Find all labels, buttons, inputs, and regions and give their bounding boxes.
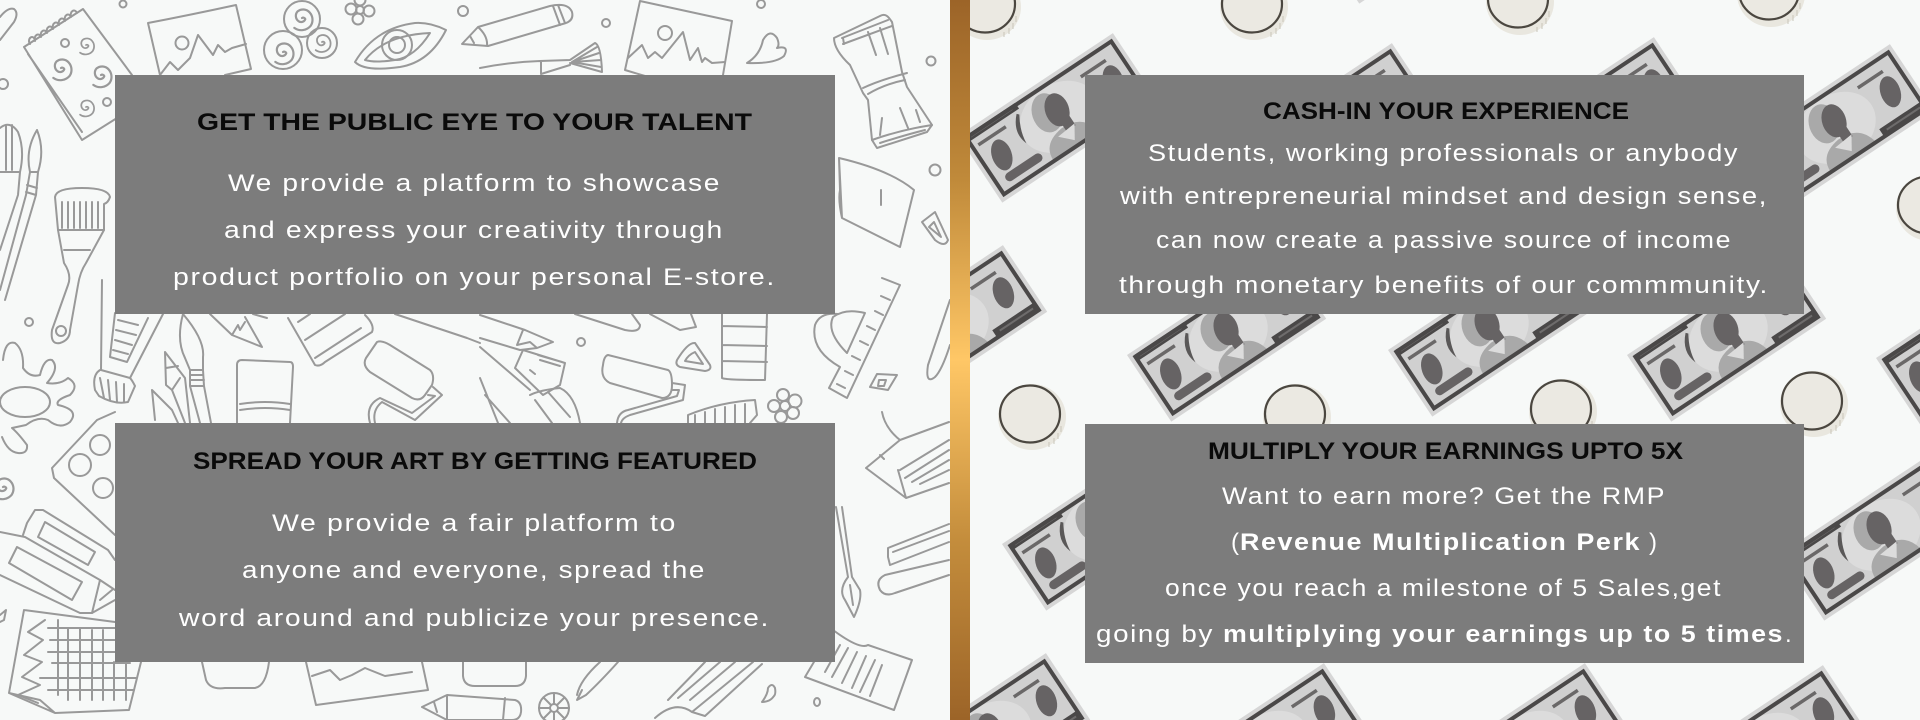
icon: small heart and circle — [762, 685, 820, 706]
heading: MULTIPLY YOUR EARNINGS UPTO 5X — [1208, 438, 1683, 465]
body text: through monetary benefits of our commmunity. — [1119, 272, 1769, 299]
icon: torn paper right — [866, 412, 949, 498]
icon: small circles — [0, 0, 940, 346]
icon: paint roller right — [602, 355, 685, 423]
icon: fan brush — [480, 43, 602, 74]
icon: diamond — [870, 374, 897, 390]
body text: We provide a fair platform to — [272, 510, 677, 537]
icon: eye — [355, 23, 446, 69]
icon: notebook with spirals — [24, 9, 132, 140]
icon: paint jar — [688, 400, 757, 423]
icon: paint tube — [94, 280, 163, 403]
panel: art supplies doodle background — [0, 0, 950, 720]
body text — [173, 170, 776, 291]
icon: paint roller left — [365, 341, 442, 423]
icon: open book — [655, 662, 762, 718]
icon: flower top — [346, 0, 374, 24]
icon: coins — [953, 0, 1920, 450]
gold divider bar — [950, 0, 970, 720]
icon: far left brushes — [0, 125, 41, 300]
panel: spread your art — [115, 423, 835, 662]
body text: ) — [1649, 529, 1658, 556]
icon: wide brush roll — [834, 15, 932, 148]
body text: going by — [1096, 621, 1214, 648]
icon: pencil — [462, 5, 572, 46]
icon: protractor and ruler — [814, 278, 900, 398]
body text: multiplying your earnings up to 5 times — [1223, 621, 1784, 648]
panel: get the public eye — [115, 75, 835, 314]
heading: CASH-IN YOUR EXPERIENCE — [1263, 98, 1629, 125]
icon: paint tubes lower left — [0, 510, 115, 622]
body text: and express your creativity through — [224, 217, 724, 244]
body text: Students, working professionals or anybody — [1148, 140, 1739, 167]
icon: lower cap — [202, 662, 269, 688]
icon: wheel — [539, 693, 569, 720]
body text: Revenue Multiplication Perk — [1240, 529, 1641, 556]
icon: striped tube right — [878, 524, 949, 594]
body text: We provide a platform to showcase — [228, 170, 721, 197]
body text — [1096, 483, 1793, 648]
icon: paint tube upper — [237, 360, 293, 423]
body text — [178, 510, 770, 632]
icon: pencils and brush cluster — [152, 314, 211, 423]
icon: grid notepad — [9, 610, 141, 713]
icon: striped cylinder — [288, 314, 373, 366]
icon: stacked blocks — [722, 314, 767, 380]
icon: picture frame right — [625, 1, 732, 76]
body text: ( — [1231, 529, 1240, 556]
icon: palette — [52, 412, 115, 535]
icon: brush bottom right — [836, 507, 860, 617]
body text: can now create a passive source of income — [1156, 227, 1732, 254]
icon: triple spirals — [264, 1, 337, 69]
icon: paint splash — [0, 343, 75, 453]
icon: rounded triangle — [676, 343, 710, 371]
icon: document bottom right — [805, 630, 912, 710]
panel: multiply your earnings — [1085, 424, 1804, 663]
icon: slim pencil — [577, 662, 618, 700]
icon: pencil and brush crossing — [395, 314, 580, 423]
body text — [1119, 140, 1769, 299]
heading: GET THE PUBLIC EYE TO YOUR TALENT — [197, 109, 752, 136]
panel: cash-in your experience — [1085, 75, 1804, 314]
body text: . — [1785, 621, 1793, 648]
icon: brush tip corner — [0, 9, 16, 40]
icon: guitar pick — [922, 212, 948, 244]
icon: lower bottle — [463, 662, 526, 686]
icon: curled paper — [839, 158, 914, 247]
body text: with entrepreneurial mindset and design sense, — [1119, 183, 1768, 210]
icon: lower picture — [306, 662, 428, 705]
icon: long brush right — [927, 300, 950, 379]
icon: flower — [768, 389, 802, 423]
icon: spiral left — [0, 478, 13, 499]
body text: once you reach a milestone of 5 Sales,get — [1165, 575, 1722, 602]
icon: heart — [747, 33, 786, 63]
body text: anyone and everyone, spread the — [242, 557, 706, 584]
icon: picture frame left — [148, 5, 251, 75]
body text: product portfolio on your personal E-store. — [173, 264, 776, 291]
heading: SPREAD YOUR ART BY GETTING FEATURED — [193, 448, 757, 475]
icon: dollar bills — [848, 0, 1920, 720]
body text: word around and publicize your presence. — [178, 605, 770, 632]
icon: bottle shapes top — [575, 314, 696, 331]
icon: pencil tip — [210, 314, 267, 347]
icon: paint brush — [52, 188, 110, 343]
panel: money pattern background — [848, 0, 1920, 720]
body text: Want to earn more? Get the RMP — [1222, 483, 1666, 510]
icon: lower pencil — [422, 695, 521, 720]
